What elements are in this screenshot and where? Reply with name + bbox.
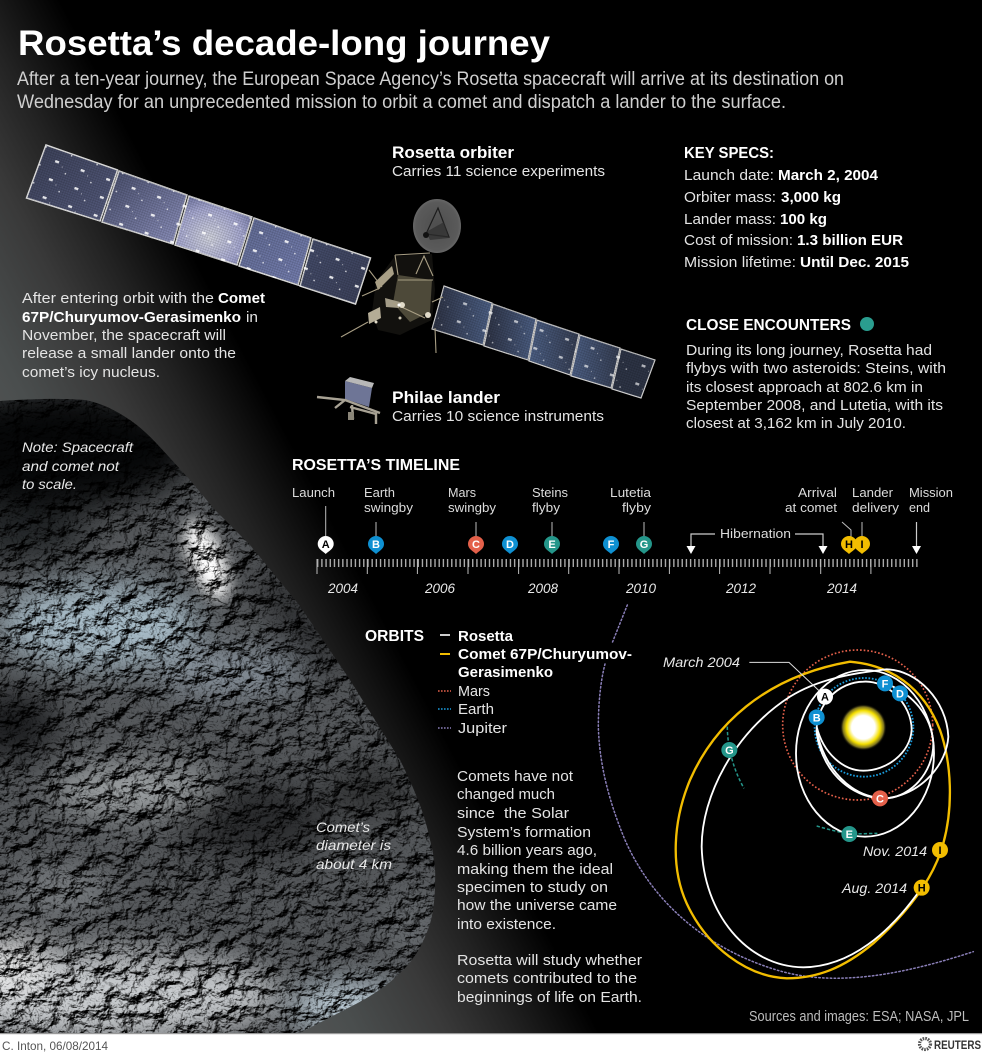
text: entering orbit [22,290,265,381]
text: entering orbit: 67P/Churyumov-Gerasimenko [22,309,241,326]
key specs: KEY SPECS: [684,145,774,162]
close encounters: During its long journey, Rosetta had [686,342,932,359]
key specs: Orbiter mass: [684,189,776,206]
orbit marker G: G [725,745,734,757]
close encounters: flybys with two asteroids: Steins, with [686,360,946,377]
close encounters: CLOSE ENCOUNTERS [686,317,851,334]
marker F: F [608,539,615,551]
subtitle: Wednesday for an unprecedented mission to orbit a comet and dispatch a lander to the surface. [17,91,786,113]
orbit marker D [892,685,908,701]
event labels: end [909,500,930,515]
event labels: Earth [364,485,395,500]
text: comets background: since the Solar [457,805,569,822]
marker A [318,536,334,554]
label: Rosetta orbiter [392,144,605,180]
text: comets background: 4.6 billion years ago, [457,842,597,859]
event labels: delivery [852,500,900,515]
text: comets background: how the universe came [457,897,617,914]
hibernation bracket: Hibernation [720,526,791,541]
key specs: March 2, 2004 [778,167,879,184]
event labels: Launch [292,485,335,500]
year labels: 2006 [424,580,455,596]
orbit marker E [841,826,857,842]
key specs: Launch date: [684,167,774,184]
Reuters logo [920,1038,981,1052]
orbit marker I: I [938,845,942,857]
marker H [841,536,857,554]
label: Rosetta orbiter: Carries 11 science experiments [392,163,605,180]
text: comets background [457,768,642,1006]
marker I: I [860,539,864,551]
title: Rosetta’s decade-long journey [18,24,551,63]
close encounters: its closest approach at 802.6 km in [686,379,923,396]
key specs: 3,000 kg [781,189,841,206]
text: comets background: beginnings of life on Earth. [457,989,642,1006]
note: scale: and comet not [22,458,120,474]
key specs: Lander mass: [684,211,776,228]
orbit date labels [663,654,927,896]
marker D: D [506,539,514,551]
text: entering orbit: After entering orbit with the [22,290,214,307]
event labels: swingby [448,500,497,515]
marker D [502,536,518,554]
orbit marker D: D [896,688,904,700]
byline: C. Inton, 06/08/2014 [2,1039,108,1053]
Rosetta trajectory [702,669,948,967]
solar array: right wing [432,286,655,398]
marker B: B [372,539,380,551]
Earth orbit [815,678,913,777]
text: comets background: changed much [457,786,555,803]
orbits legend: Gerasimenko [458,664,553,681]
marker G [636,536,652,554]
text: entering orbit: November, the spacecraft will [22,327,226,344]
text: entering orbit: release a small lander onto the [22,345,236,362]
key specs: Until Dec. 2015 [800,254,909,271]
text: comets background: Comets have not [457,768,574,785]
orbit marker H [914,880,930,896]
event labels: Mars [448,485,476,500]
text: entering orbit: Comet [218,290,265,307]
orbit marker F [877,675,893,691]
sun [840,704,887,751]
marker I [854,536,870,554]
note: scale [22,439,134,492]
label: Philae lander [392,389,604,425]
year labels: 2008 [527,580,558,596]
close encounters: closest at 3,162 km in July 2010. [686,415,906,432]
marker H: H [845,539,853,551]
marker A: A [322,539,330,551]
spacecraft bus [341,253,443,353]
note: comet diameter: diameter is [316,837,391,853]
text: comets background: comets contributed to the [457,970,637,987]
year labels: 2014 [826,580,857,596]
year labels: 2010 [625,580,656,596]
comet nucleus [0,390,440,1039]
marker C [468,536,484,554]
orbits legend [365,628,632,737]
key specs: Cost of mission: [684,232,793,249]
marker G: G [640,539,648,551]
asteroid paths [727,727,877,834]
label: Philae lander: Philae lander [392,389,501,407]
orbits legend: Jupiter [458,720,507,737]
footer bar [0,1033,982,1054]
label: Philae lander: Carries 10 science instruments [392,408,604,425]
orbit marker C: C [876,793,884,805]
note: comet diameter: about 4 km [316,856,392,872]
orbit date labels: March 2004 [663,654,740,670]
orbit marker I [932,842,948,858]
text: comets background: into existence. [457,916,556,933]
teal legend dot [860,317,874,331]
orbit marker H: H [918,883,926,895]
note: scale: to scale. [22,476,77,492]
orbit marker E: E [846,829,853,841]
orbit marker A: A [821,692,829,704]
orbit date labels: Aug. 2014 [841,880,907,896]
timeline [292,457,953,596]
orbit diagram [598,605,973,978]
marker E: E [548,539,556,551]
year labels [327,580,857,596]
event labels: at comet [785,500,837,515]
orbits legend: Rosetta [458,628,514,645]
timeline heading: ROSETTA’S TIMELINE [292,457,460,474]
ruler [317,559,918,574]
event labels: Steins [532,485,568,500]
text: entering orbit: in [246,309,258,326]
Philae lander illustration [317,377,380,424]
text: comets background: making them the ideal [457,861,613,878]
orbit marker C [872,790,888,806]
note: comet diameter [316,819,392,872]
marker C: C [472,539,480,551]
close encounters: September 2008, and Lutetia, with its [686,397,943,414]
solar array: left wing [26,145,370,304]
orbit marker G [721,742,737,758]
orbits legend: ORBITS [365,628,424,645]
orbit marker B [809,709,825,725]
text: comets background: System’s formation [457,824,591,841]
orbit date labels: Nov. 2014 [863,843,927,859]
marker stems [326,506,862,537]
subtitle: After a ten-year journey, the European Space Agency’s Rosetta spacecraft will arrive at its destination on [17,68,844,90]
marker F [603,536,619,554]
key specs: 1.3 billion EUR [797,232,903,249]
Rosetta spacecraft body [341,199,461,353]
note: scale: Note: Spacecraft [22,439,134,455]
orbit marker A [817,689,833,705]
event labels: Mission [909,485,953,500]
Jupiter orbit [598,605,973,978]
subtitle [17,68,844,113]
event labels: Lander [852,485,894,500]
event labels: Lutetia [610,485,652,500]
event labels: swingby [364,500,414,515]
text: comets background: specimen to study on [457,879,608,896]
text: comets background: Rosetta will study whether [457,952,642,969]
event labels [292,485,953,515]
event labels: flyby [532,500,561,515]
year labels: 2004 [327,580,358,596]
hibernation bracket [686,522,921,554]
key specs: Mission lifetime: [684,254,796,271]
comet 67P orbit [676,662,950,978]
text: entering orbit: comet’s icy nucleus. [22,364,160,381]
event labels: flyby [622,500,652,515]
key specs [684,145,909,271]
label: Rosetta orbiter: Rosetta orbiter [392,144,515,162]
note: comet diameter: Comet’s [316,819,370,835]
orbits legend: Mars [458,683,490,700]
Mars orbit [783,650,933,800]
close encounters [686,317,946,432]
orbit marker B: B [813,712,821,724]
year labels: 2012 [725,580,756,596]
key specs: 100 kg [780,211,827,228]
marker B [368,536,384,554]
orbit marker F: F [882,678,889,690]
orbits legend: Earth [458,701,494,718]
event labels: Arrival [798,485,837,500]
marker E [544,536,560,554]
high-gain antenna dish [413,199,461,253]
orbits legend: Comet 67P/Churyumov- [458,646,632,663]
March 2004 leader [749,662,820,692]
